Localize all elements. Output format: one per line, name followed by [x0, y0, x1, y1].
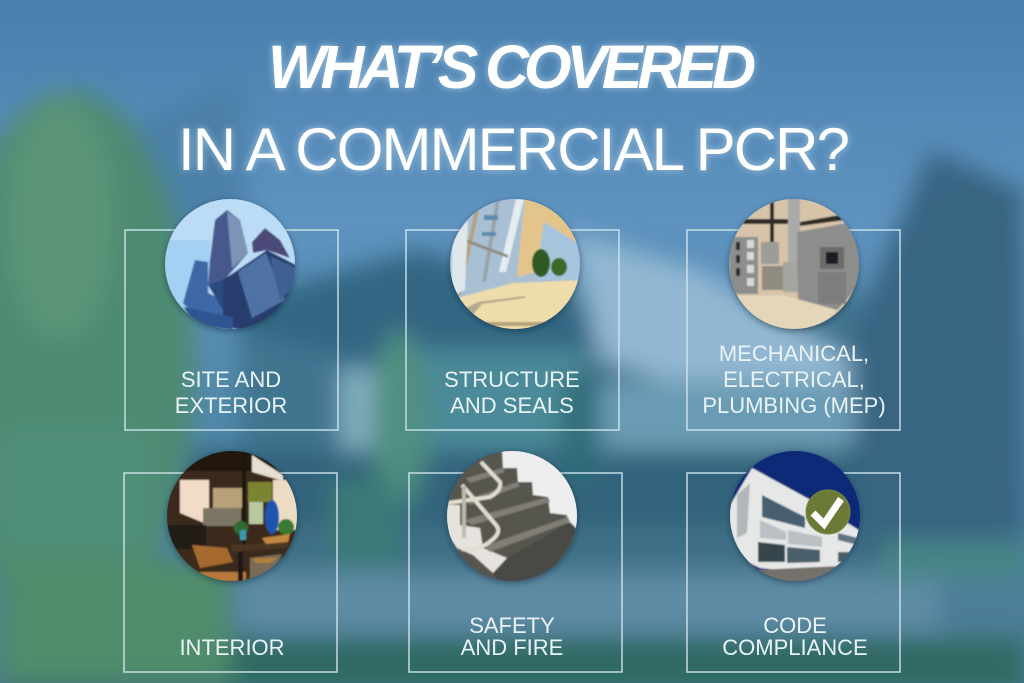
label: structure and seals: STRUCTURE	[444, 367, 580, 392]
panel: code compliance	[687, 473, 900, 672]
label: code compliance: COMPLIANCE	[722, 635, 868, 660]
icon: electrical room photo	[725, 195, 865, 335]
label: site and exterior: EXTERIOR	[175, 393, 287, 418]
panel: site and exterior	[125, 230, 338, 430]
icon: check badge	[806, 490, 850, 534]
label: MEP: ELECTRICAL,	[723, 367, 865, 392]
label: MEP: PLUMBING (MEP)	[702, 393, 886, 418]
icon: skyscrapers photo	[160, 195, 300, 335]
panel: interior	[124, 473, 337, 672]
label: code compliance: CODE	[763, 613, 827, 638]
panel: structure and seals	[406, 230, 619, 430]
icon: white commercial building with check badge	[726, 449, 863, 585]
label: structure and seals: AND SEALS	[450, 393, 574, 418]
icon: staircase photo	[445, 449, 582, 585]
title line 1: WHAT’S COVERED	[268, 33, 756, 101]
panel: safety and fire	[409, 473, 622, 672]
label: safety and fire: AND FIRE	[461, 635, 563, 660]
panel: MEP	[687, 230, 900, 430]
label: safety and fire: SAFETY	[469, 613, 555, 638]
icon: cafe interior photo	[165, 449, 300, 584]
icon: glass corridor photo	[445, 195, 585, 335]
label: MEP: MECHANICAL,	[719, 341, 869, 366]
label: interior: INTERIOR	[179, 635, 285, 660]
title line 2: IN A COMMERCIAL PCR?	[178, 116, 850, 183]
label: site and exterior: SITE AND	[181, 367, 281, 392]
